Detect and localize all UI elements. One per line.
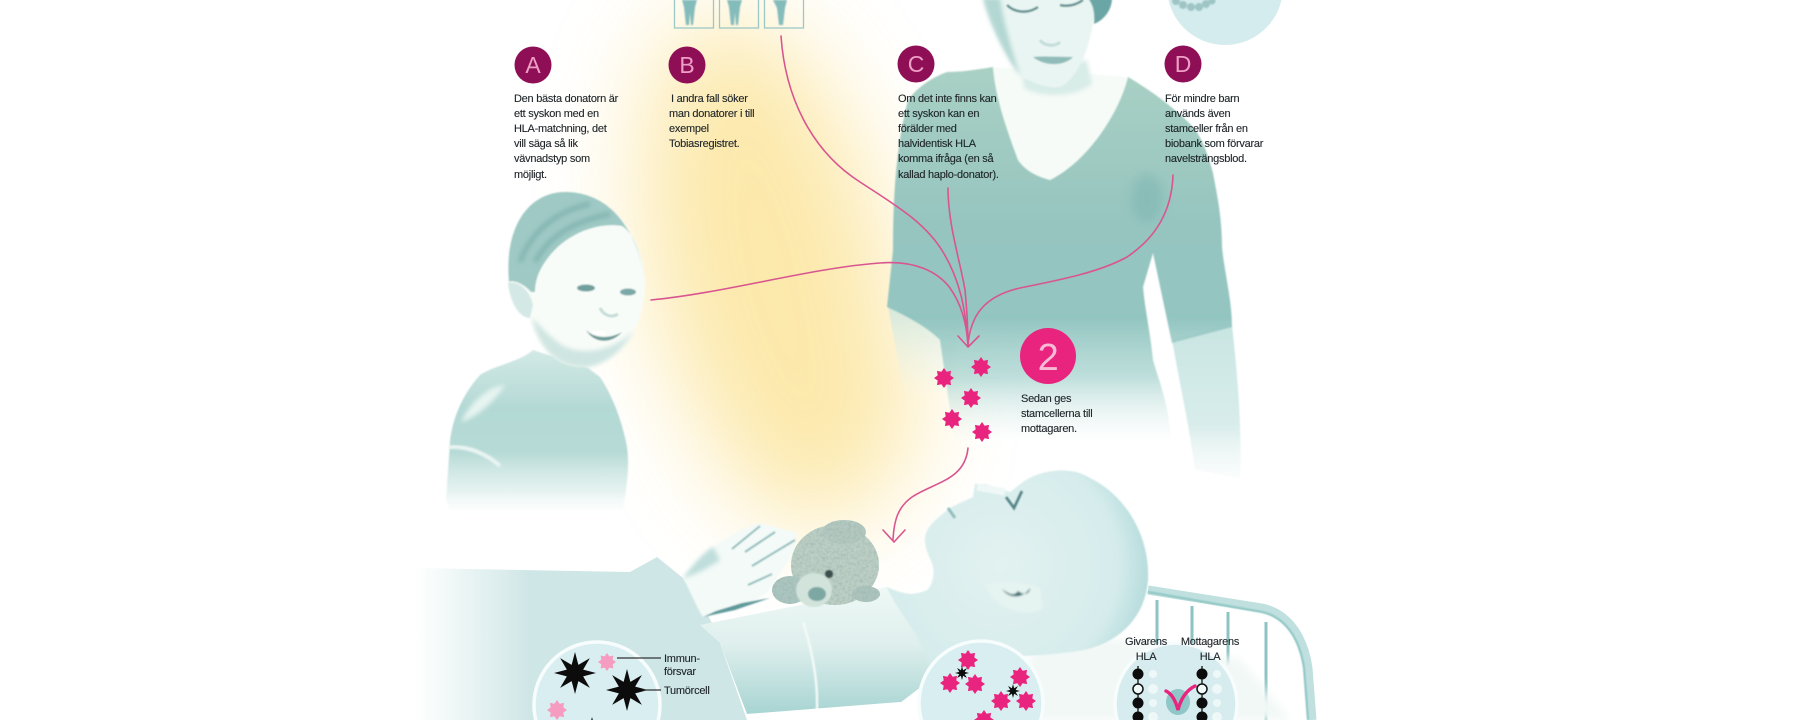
bed frame [1148, 590, 1312, 720]
step 2 badge: 2 [1038, 337, 1058, 379]
text A: vävnadstyp som [514, 153, 590, 165]
person boxes: donor register [674, 0, 804, 28]
badge B [668, 46, 706, 84]
woman right forearm [1172, 325, 1241, 478]
immune cells [547, 653, 616, 720]
yellow glow [597, 0, 943, 550]
badge A [514, 46, 552, 84]
arrow head: stem cells [958, 336, 979, 347]
text C: kallad haplo-donator). [898, 169, 999, 181]
teddy bear [772, 520, 880, 605]
patient ear [985, 582, 1043, 613]
child eyes [577, 284, 595, 292]
patient blanket [415, 557, 747, 720]
recipient HLA chain [1196, 666, 1222, 720]
child [446, 192, 645, 518]
text D: biobank som förvarar [1165, 138, 1264, 150]
patient nose bridge [977, 487, 1005, 492]
patient chest and shoulder [700, 587, 1000, 714]
arrow: biobank to stem cells [968, 175, 1173, 346]
woman eyes [1007, 5, 1038, 12]
stem cells [934, 357, 992, 442]
text B: Tobiasregistret. [669, 138, 740, 150]
step 2 badge [1020, 328, 1076, 384]
HLA labels: HLA [1200, 651, 1221, 663]
text D: stamceller från en [1165, 123, 1248, 135]
step 2 text: stamcellerna till [1021, 408, 1092, 420]
text D: För mindre barn [1165, 93, 1239, 105]
woman neck [1022, 60, 1092, 95]
text A: vill säga så lik [514, 138, 578, 150]
label: tumour cell: Tumörcell [664, 685, 710, 697]
badge C [898, 46, 934, 82]
text B [669, 93, 754, 150]
woman mouth [1033, 57, 1073, 64]
child nose and cheek shade [600, 308, 618, 316]
child sleeve stripes [449, 447, 500, 466]
patient eye [1006, 491, 1022, 508]
arrow: stem cells to patient [893, 448, 968, 540]
patient head [887, 470, 1148, 690]
text A: Den bästa donatorn är [514, 93, 619, 105]
woman neckline skin [993, 67, 1128, 180]
text C: förälder med [898, 123, 957, 135]
text D: navelsträngsblod. [1165, 153, 1247, 165]
arrow: parent to stem cells [948, 188, 968, 346]
badge C: C [908, 51, 924, 77]
woman sweater shadow [1131, 174, 1163, 222]
child mouth [586, 330, 622, 341]
woman face [983, 0, 1100, 87]
text D: används även [1165, 108, 1231, 120]
child face shade [532, 318, 634, 367]
woman nose [1040, 40, 1060, 45]
HLA labels: Mottagarens [1181, 636, 1240, 648]
badge A: A [525, 52, 541, 78]
patient hand [683, 523, 797, 617]
arrow: register to stem cells [781, 36, 968, 346]
patient lips [948, 508, 955, 518]
text A [514, 93, 619, 181]
text C [898, 93, 999, 181]
text D [1165, 93, 1264, 165]
badge D [1164, 46, 1202, 82]
HLA labels: HLA [1136, 651, 1157, 663]
woman hair [1088, 0, 1112, 24]
label: immune defence: Immun- [664, 653, 700, 665]
circle: HLA match [1115, 643, 1237, 720]
tumour cells [554, 652, 648, 720]
circle: before treatment, tumour cells [534, 642, 660, 720]
text B: I andra fall söker [671, 93, 748, 105]
woman sweater [887, 67, 1232, 445]
woman left forearm [888, 306, 960, 400]
text A: möjligt. [514, 169, 547, 181]
pillow and sheet [1000, 640, 1290, 720]
label: immune defence: försvar [664, 666, 696, 678]
text C: ett syskon kan en [898, 108, 979, 120]
badge D: D [1175, 51, 1191, 77]
patient sleeve edge [803, 622, 817, 710]
child hair streaks [520, 204, 610, 262]
woman cheek shade [983, 0, 1020, 76]
child hair [508, 192, 645, 292]
match check mark [1166, 686, 1195, 715]
child head [508, 192, 645, 367]
child ear [508, 282, 533, 318]
text A: ett syskon med en [514, 108, 599, 120]
badge B: B [679, 52, 695, 78]
label: tumour cell [643, 685, 710, 697]
label: immune defence [617, 653, 700, 678]
text C: komma ifråga (en så [898, 153, 994, 165]
text C: Om det inte finns kan [898, 93, 997, 105]
child body [446, 350, 628, 518]
donor HLA chain [1132, 666, 1158, 720]
child sleeve highlight [462, 385, 505, 422]
arrow: child to stem cells [651, 263, 968, 346]
circle: after treatment, immune cells attack [919, 641, 1043, 720]
step 2 text: mottagaren. [1021, 423, 1077, 435]
patient bed sheet [747, 702, 940, 720]
text C: halvidentisk HLA [898, 138, 977, 150]
text B: man donatorer i till [669, 108, 754, 120]
HLA labels: Givarens [1125, 636, 1168, 648]
text B: exempel [669, 123, 709, 135]
HLA labels [1125, 636, 1240, 663]
step 2 text [1021, 393, 1092, 435]
woman [887, 0, 1241, 478]
top right circle: cell illustration [1167, 0, 1283, 45]
step 2 text: Sedan ges [1021, 393, 1072, 405]
text A: HLA-matchning, det [514, 123, 607, 135]
teddy face [796, 570, 833, 607]
arrow head: patient [883, 530, 905, 542]
